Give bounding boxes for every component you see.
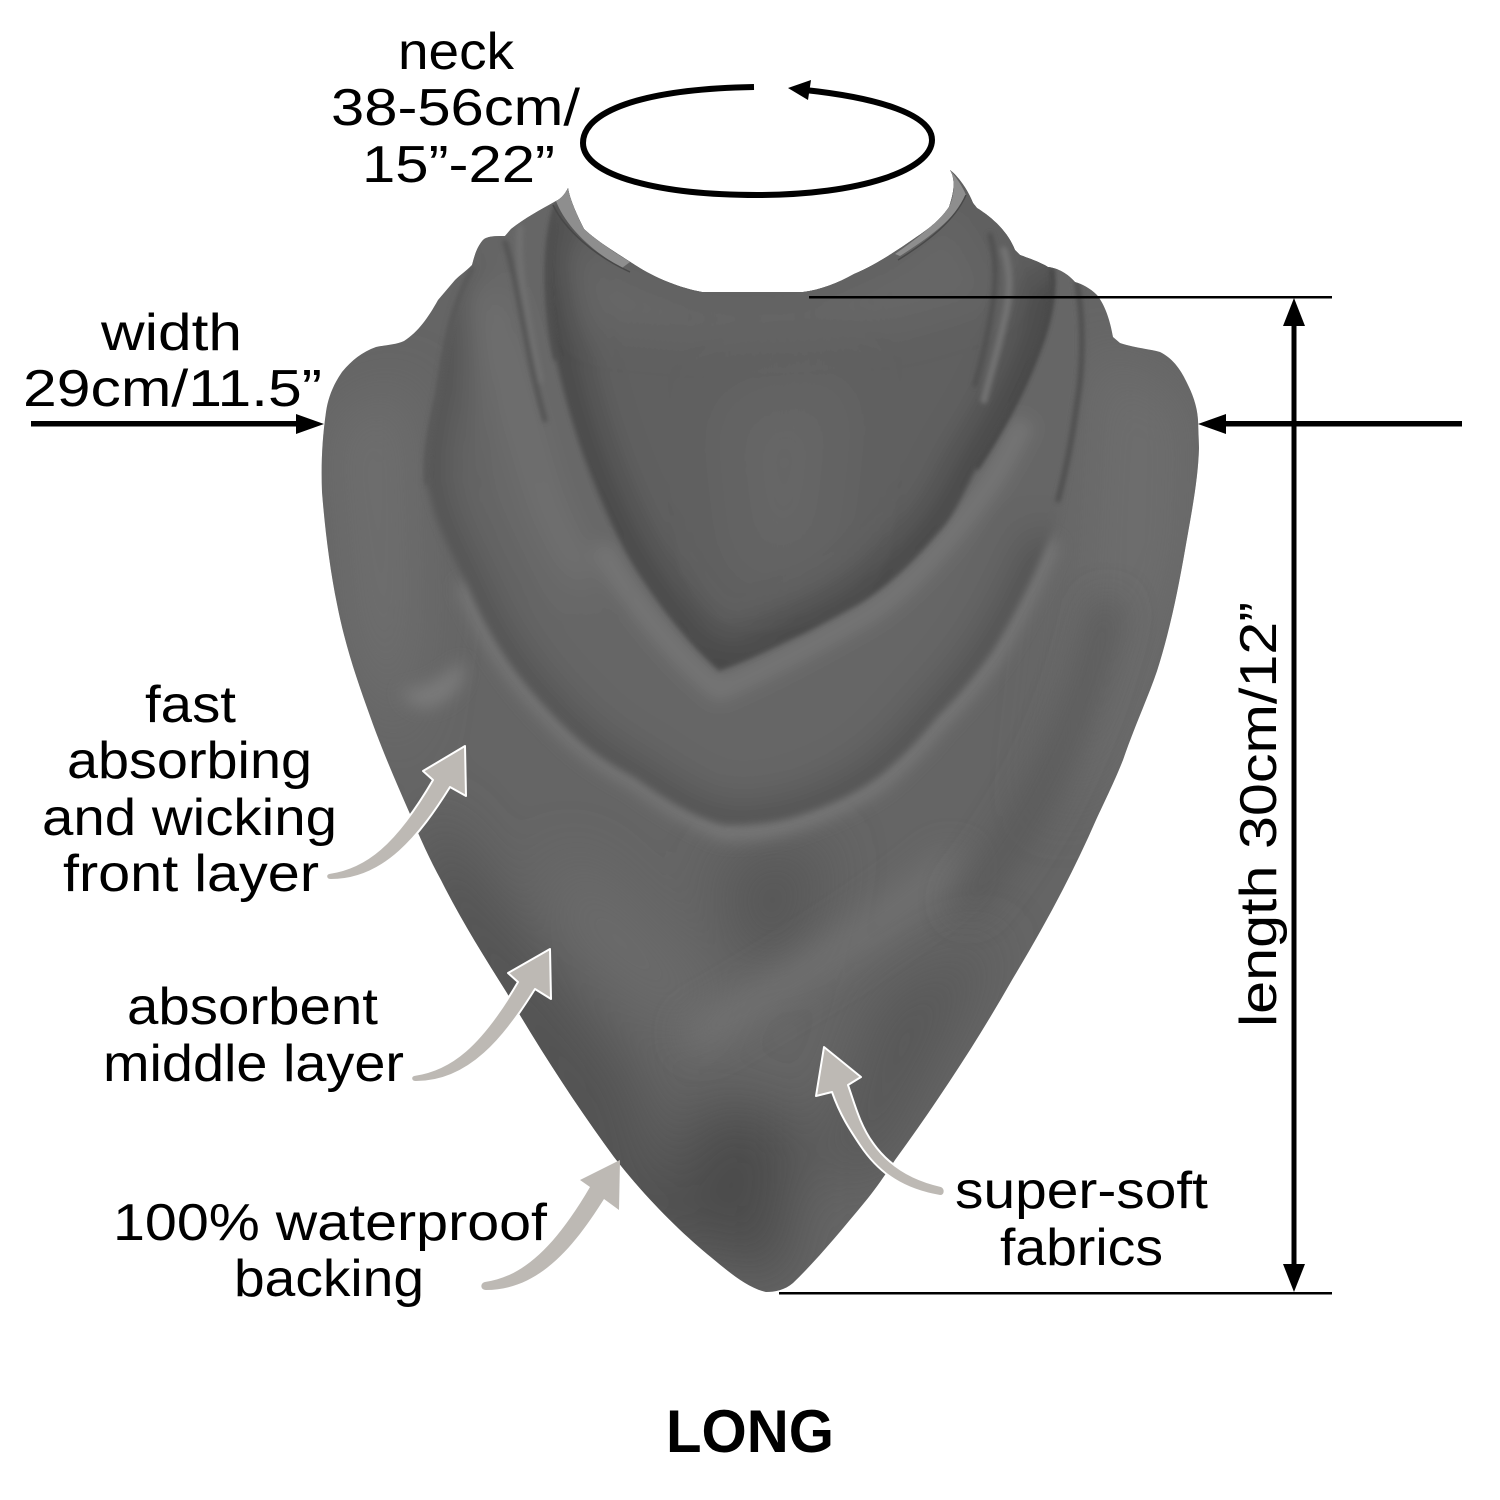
light spot on left flank	[408, 666, 464, 709]
arrow: middle layer	[411, 949, 551, 1082]
neck label	[331, 23, 581, 194]
label: front layer: fast	[145, 676, 237, 734]
label: front layer: absorbing	[67, 732, 312, 790]
label: front layer: front layer	[63, 845, 319, 903]
neck measurement arrow	[583, 80, 932, 195]
dark flank under second fold right	[960, 600, 1110, 910]
label: middle layer	[103, 978, 404, 1093]
width arrow left	[31, 414, 324, 434]
label: super-soft fabrics: fabrics	[1000, 1219, 1163, 1277]
label: waterproof backing	[113, 1194, 548, 1308]
label: waterproof backing: 100% waterproof	[113, 1194, 548, 1252]
arrow: waterproof backing	[481, 1160, 620, 1290]
width arrow right	[1198, 414, 1462, 434]
label: front layer	[42, 676, 337, 903]
width label: 29cm/11.5”	[23, 360, 322, 418]
rim light along first fold	[600, 420, 1025, 690]
label: front layer: and wicking	[42, 789, 337, 847]
label: super-soft fabrics	[955, 1162, 1209, 1277]
collar lining	[556, 186, 630, 268]
label: middle layer: absorbent	[127, 978, 379, 1036]
width label	[23, 304, 322, 418]
neck label: 15”-22”	[362, 136, 555, 194]
area inside second fold	[428, 170, 1079, 827]
length bottom guide line	[779, 1292, 1332, 1294]
neck label: 38-56cm/	[331, 79, 581, 137]
title: LONG: LONG	[666, 1398, 834, 1465]
shoulder creases	[427, 207, 1082, 500]
lower diagonal highlight	[720, 880, 936, 1024]
arrow: front layer	[326, 746, 466, 880]
label: super-soft fabrics: super-soft	[955, 1162, 1209, 1220]
neck label: neck	[398, 23, 515, 81]
arrow: super-soft fabrics	[816, 1047, 945, 1196]
label: waterproof backing: backing	[234, 1250, 424, 1308]
outer flank and lower tones	[330, 340, 1195, 1300]
label: middle layer: middle layer	[103, 1035, 404, 1093]
area inside first fold (central drape)	[550, 170, 1052, 672]
length top guide line	[809, 296, 1332, 298]
width label: width	[100, 304, 242, 362]
length arrow	[1283, 298, 1305, 1292]
length label: length 30cm/12”	[1230, 602, 1288, 1027]
rim light under second fold	[466, 540, 1050, 830]
illustration: grey bandana bib	[300, 150, 1220, 1310]
